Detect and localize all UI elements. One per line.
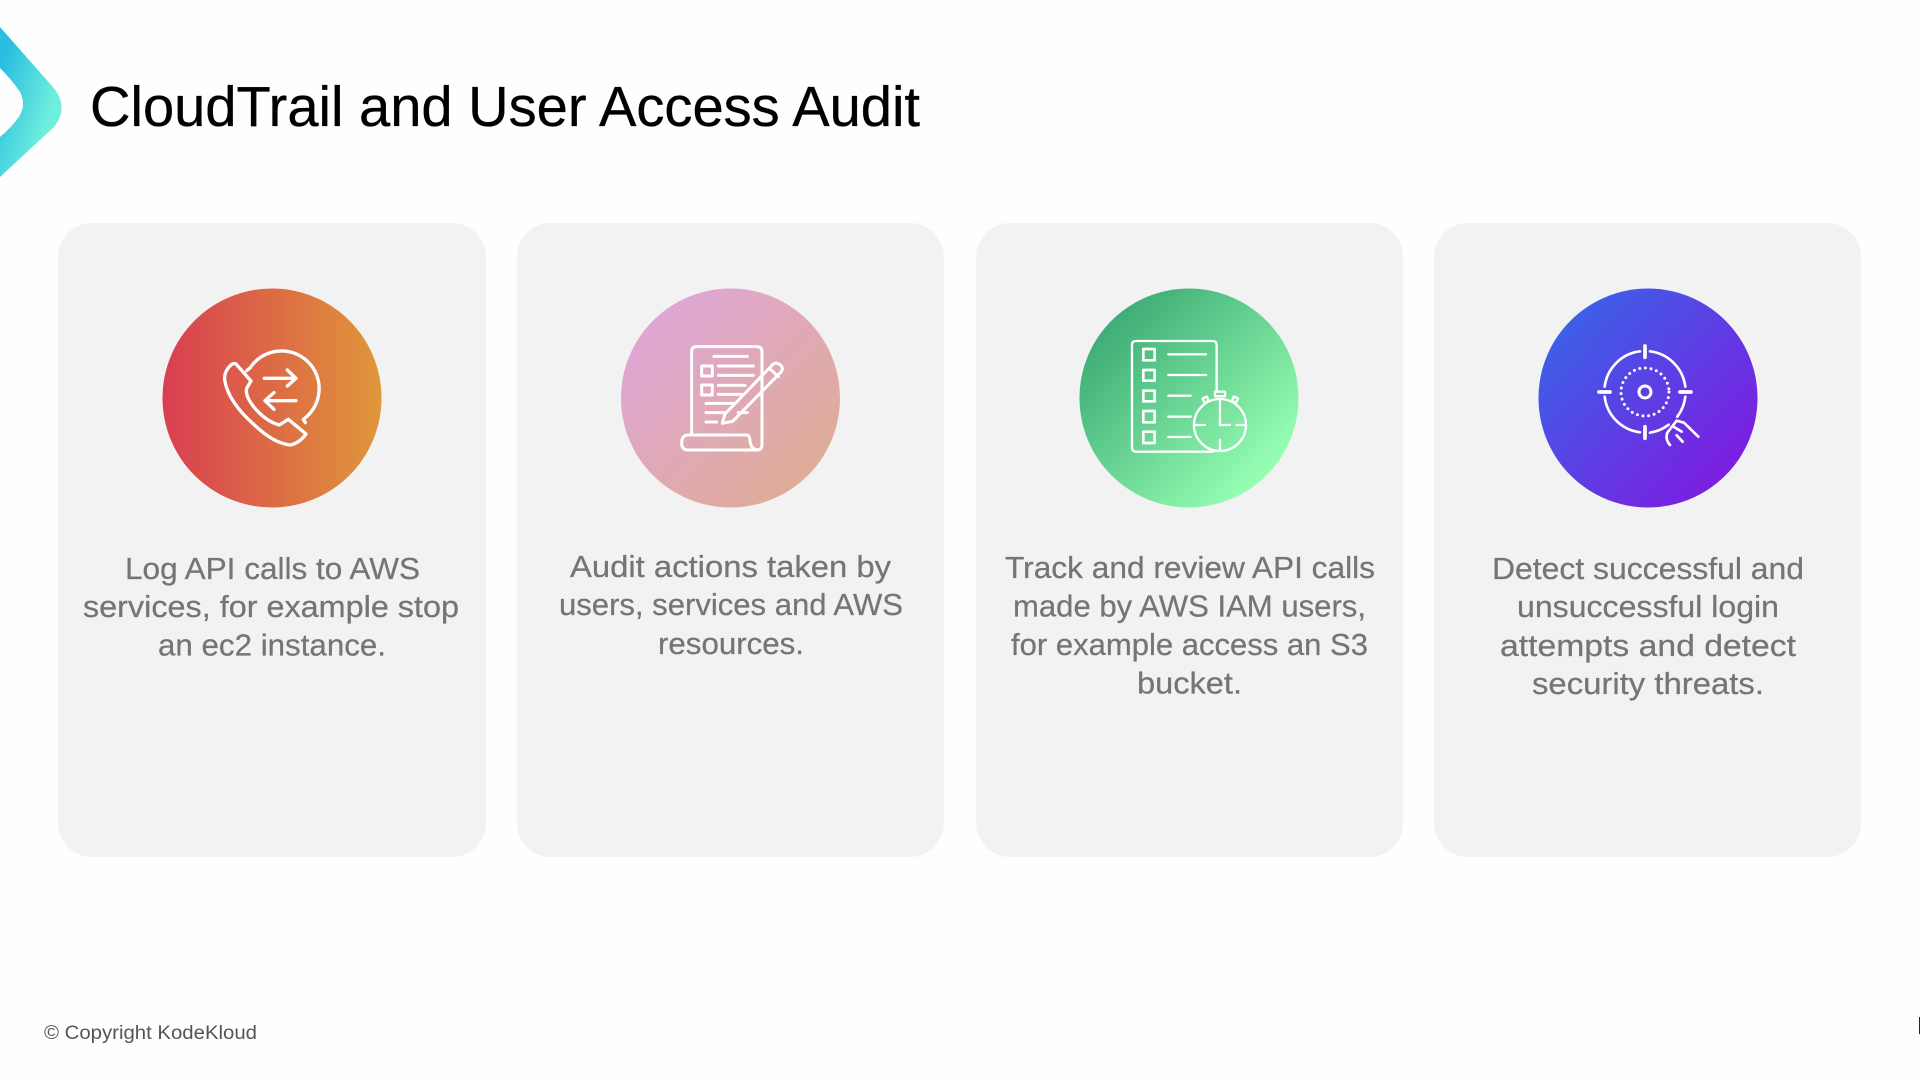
panel: log API calls [58, 223, 486, 857]
text: log API calls: an ec2 instance. [158, 628, 386, 662]
footer copyright: © Copyright KodeKloud [44, 1022, 257, 1044]
logo chevron [0, 27, 62, 177]
text: log API calls [83, 551, 459, 662]
text: track API calls: bucket. [1137, 666, 1242, 700]
text: log API calls: Log API calls to AWS [125, 551, 420, 586]
title: CloudTrail and User Access Audit [90, 75, 920, 139]
text: track API calls: for example access an S3 [1011, 627, 1368, 662]
text: detect login attempts: security threats. [1532, 666, 1764, 701]
icon: checklist and stopwatch [1080, 288, 1298, 508]
panel: detect login attempts [1434, 223, 1861, 857]
text: log API calls: services, for example stop [83, 589, 459, 624]
icon: phone with arrows [162, 288, 382, 508]
text: detect login attempts: unsuccessful login [1517, 589, 1779, 624]
text: audit actions [559, 549, 903, 661]
panel: track API calls [976, 223, 1403, 857]
text: track API calls: made by AWS IAM users, [1013, 588, 1366, 624]
text: detect login attempts [1492, 551, 1804, 701]
icon: document and pencil [621, 288, 840, 508]
text: audit actions: Audit actions taken by [570, 549, 892, 584]
text: audit actions: resources. [658, 626, 804, 661]
panel: audit actions [517, 223, 944, 857]
text: track API calls: Track and review API calls [1005, 550, 1375, 585]
text: detect login attempts: attempts and detect [1500, 628, 1796, 663]
text: detect login attempts: Detect successful and [1492, 551, 1804, 586]
text: track API calls [1005, 550, 1375, 700]
text: audit actions: users, services and AWS [559, 587, 903, 622]
icon: target and hand [1538, 288, 1758, 508]
